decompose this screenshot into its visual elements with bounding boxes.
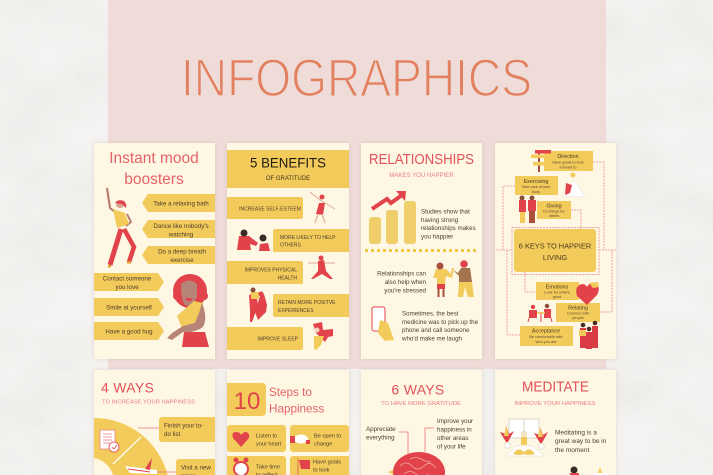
panel: 10 steps to happiness: [227, 370, 349, 475]
arrow: rising: [372, 191, 406, 209]
chart: rising bars: [369, 201, 416, 244]
connectors: [495, 162, 616, 335]
step: listen to your heart: [227, 425, 286, 452]
icon: hand with phone: [372, 307, 394, 341]
key: relating: Relating: [568, 306, 588, 312]
text: studies show: [421, 208, 476, 240]
text: studies show: relationships makes: [421, 225, 476, 232]
step: be open to change: [290, 425, 349, 452]
text: appreciate everything: Appreciate: [366, 426, 396, 433]
text: meditating is a great way: Meditating is a: [555, 430, 597, 436]
text: relationships can help: Relationships can: [377, 270, 427, 278]
heading: meditate: MEDITATE: [522, 378, 589, 396]
key: emotions: Emotions: [546, 284, 569, 290]
callout: take a relaxing bath: Take a relaxing bath: [153, 200, 209, 208]
arrows: to brain rose: [399, 428, 434, 454]
key: exercising: Take care of your: [521, 185, 551, 189]
text: studies show: Studies show that: [421, 208, 470, 216]
icon: dancing couple: [249, 288, 267, 322]
benefit: more likely to help others: [273, 229, 349, 252]
text: appreciate everything: everything: [366, 434, 395, 442]
key: main label: [514, 229, 596, 272]
callout: good hug: Have a good hug: [105, 328, 153, 336]
text: improve your happiness: Improve your: [437, 418, 473, 425]
subheading: makes you happier: MAKES YOU HAPPIER: [389, 172, 454, 179]
text: meditating is a great way: great way to be in: [555, 438, 607, 445]
step: listen to your heart: Listen to: [256, 434, 277, 440]
icon: helping people: [237, 230, 270, 251]
text: sometimes the best medicine: who'd make me laugh: [401, 336, 463, 342]
icon: friends high five: [433, 260, 474, 297]
callout: deep breath: exercise: [170, 257, 194, 264]
icon: airplane: [125, 458, 157, 474]
header band: [227, 150, 349, 188]
icon: second meditating figure: [570, 466, 609, 475]
icon: sleeping figure: [313, 322, 333, 350]
key: main label: 6 KEYS TO HAPPIER: [519, 242, 591, 250]
text: improve your happiness: other areas: [437, 435, 468, 442]
heading: instant mood boosters: boosters: [124, 171, 184, 188]
callout: deep breath: Do a deep breath: [158, 248, 206, 256]
callout: finish your to-do list: do list: [164, 431, 180, 438]
chart: quarter wheel: [94, 418, 168, 475]
benefit: improves physical health: HEALTH: [278, 276, 297, 282]
step: have goals to look forward to: to look: [313, 468, 330, 474]
callout: finish your to-do list: [138, 417, 215, 442]
key: relating: [556, 303, 600, 322]
callout: contact someone: [94, 273, 164, 291]
title: INFOGRAPHICS: [181, 49, 532, 108]
step: take time to reflect: Take time: [256, 464, 280, 470]
text: meditating is a great way: [555, 430, 607, 454]
key: acceptance: Acceptance: [532, 328, 560, 334]
callout: good hug: [94, 322, 164, 340]
icon: woman with curly hair: [167, 274, 209, 347]
heading: instant mood boosters: [109, 150, 199, 188]
panel: meditate: [495, 370, 616, 475]
text: appreciate everything: [366, 426, 396, 442]
key: direction: forward to: [560, 166, 576, 170]
icon: checklist: [100, 430, 119, 452]
heading: 4 ways: 4 WAYS: [101, 380, 154, 396]
header band: 5 BENEFITS: [250, 154, 326, 170]
key: exercising: [515, 176, 558, 195]
benefit: increase self-esteem: [227, 197, 303, 219]
text: sometimes the best medicine: [401, 310, 479, 342]
icon: carers: [519, 196, 536, 223]
callout: dance: watching: [168, 232, 194, 238]
key: giving: others: [549, 214, 559, 218]
callout: visit a new place: Visit a new: [181, 464, 211, 472]
text: sometimes the best medicine: phone and call someone: [402, 327, 470, 334]
text: relationships can help: you're stressed: [384, 288, 427, 294]
step: listen to your heart: your heart: [256, 442, 282, 448]
text: relationships can help: [377, 270, 427, 294]
key: main label: LIVING: [543, 253, 567, 262]
benefit: improves physical health: [227, 261, 303, 284]
icon: heart: [576, 282, 599, 305]
header band: OF GRATITUDE: [266, 176, 310, 182]
key: acceptance: Be comfortable with: [529, 335, 563, 339]
heading: steps to happiness: Happiness: [269, 402, 324, 416]
key: giving: Do things for: [543, 210, 565, 214]
text: improve your happiness: [437, 418, 473, 450]
benefit: retain positive experiences: EXPERIENCES: [278, 308, 314, 314]
callout: contact someone: you love: [115, 284, 139, 291]
heading: steps to happiness: [269, 386, 324, 416]
callout: visit a new place: [157, 459, 215, 475]
heading: steps to happiness: Steps to: [269, 386, 312, 399]
key: giving: [537, 201, 571, 219]
callout: take a relaxing bath: [142, 194, 215, 212]
panel: instant mood boosters: [94, 143, 215, 359]
benefit: improve sleep: IMPROVE SLEEP: [257, 336, 299, 342]
pink backing panel: [108, 0, 606, 369]
callout: contact someone: Contact someone: [103, 276, 152, 282]
icon: nature figure: [562, 172, 585, 197]
benefit: retain positive experiences: RETAIN MORE POSITVE: [278, 300, 336, 306]
callout: dance: Dance like nobody's: [153, 223, 209, 230]
icon: brain rose: [388, 452, 445, 475]
panel: 6 keys to happier living: [495, 143, 616, 359]
icon: meditating person with plants: [500, 419, 548, 456]
step: take time to reflect: [227, 456, 286, 475]
key: exercising: body: [532, 190, 540, 194]
benefit: more likely to help others: OTHERS: [280, 242, 302, 248]
text: relationships can help: also help when: [385, 279, 427, 286]
icon: cafe table: [528, 304, 552, 322]
benefit: improves physical health: IMPROVES PHYSICAL: [244, 268, 297, 274]
key: direction: Direction: [557, 154, 579, 160]
icon: signpost: [531, 150, 551, 172]
panel: 4 ways: [94, 370, 215, 475]
step: be open to change: Be open to: [314, 434, 341, 440]
key: direction: [544, 151, 593, 171]
key: acceptance: [520, 326, 573, 346]
text: sometimes the best medicine: Sometimes, the best: [402, 310, 459, 318]
text: sometimes the best medicine: medicine was to pick up the: [402, 319, 479, 326]
benefit: more likely to help others: MORE LIKELY TO HELP: [280, 235, 336, 241]
callout: smile: Smile at yourself: [106, 304, 152, 312]
badge: 10: 10: [234, 388, 260, 415]
callout: smile: [94, 298, 164, 316]
key: emotions: [536, 282, 579, 300]
key: exercising: Exercising: [524, 179, 548, 185]
step: have goals to look forward to: [290, 456, 349, 475]
text: meditating is a great way: the moment: [555, 447, 590, 454]
text: studies show: having strong: [421, 217, 459, 224]
text: improve your happiness: happiness in: [437, 426, 472, 434]
text: improve your happiness: of your life: [437, 444, 466, 450]
panel: relationships: [361, 143, 482, 359]
key: direction: Have goals to look: [552, 160, 584, 164]
subheading: IMPROVE YOUR HAPPINESS: [514, 401, 596, 407]
heading: 6 ways: 6 WAYS: [391, 382, 445, 398]
benefit: increase self-esteem: INCREASE SELF-ESTEEM: [239, 206, 301, 212]
icon: dancer: [310, 192, 335, 223]
heading: instant mood boosters: Instant mood: [109, 150, 199, 167]
step: have goals to look forward to: Have goals: [313, 460, 341, 466]
subheading: TO INCREASE YOUR HAPPINESS: [102, 400, 195, 406]
icon: group of people: [579, 321, 598, 349]
key: relating: people: [572, 316, 584, 320]
icon: dancing woman: [107, 188, 134, 268]
heading: relationships: RELATIONSHIPS: [369, 151, 474, 168]
key: acceptance: who you are: [536, 340, 556, 344]
benefit: improve sleep: [227, 327, 303, 350]
panel: 6 ways to more gratitude: [361, 370, 482, 475]
key: emotions: Look for what's: [544, 290, 570, 294]
benefit: retain positive experiences: [273, 294, 349, 317]
dotted divider: [365, 249, 479, 252]
text: studies show: you happier: [421, 234, 453, 240]
key: giving: Giving: [546, 204, 562, 210]
key: relating: Connect with: [567, 312, 589, 316]
panel: 5 benefits of gratitude: [227, 143, 349, 359]
callout: dance: [142, 220, 215, 238]
icon: lunge figure: [308, 256, 335, 279]
key: emotions: good: [553, 295, 561, 299]
callout: finish your to-do list: Finish your to-: [164, 422, 203, 430]
subheading: TO HAVE MORE GRATITUDE: [381, 401, 461, 407]
callout: deep breath: [142, 246, 215, 264]
step: be open to change: change: [314, 442, 332, 448]
